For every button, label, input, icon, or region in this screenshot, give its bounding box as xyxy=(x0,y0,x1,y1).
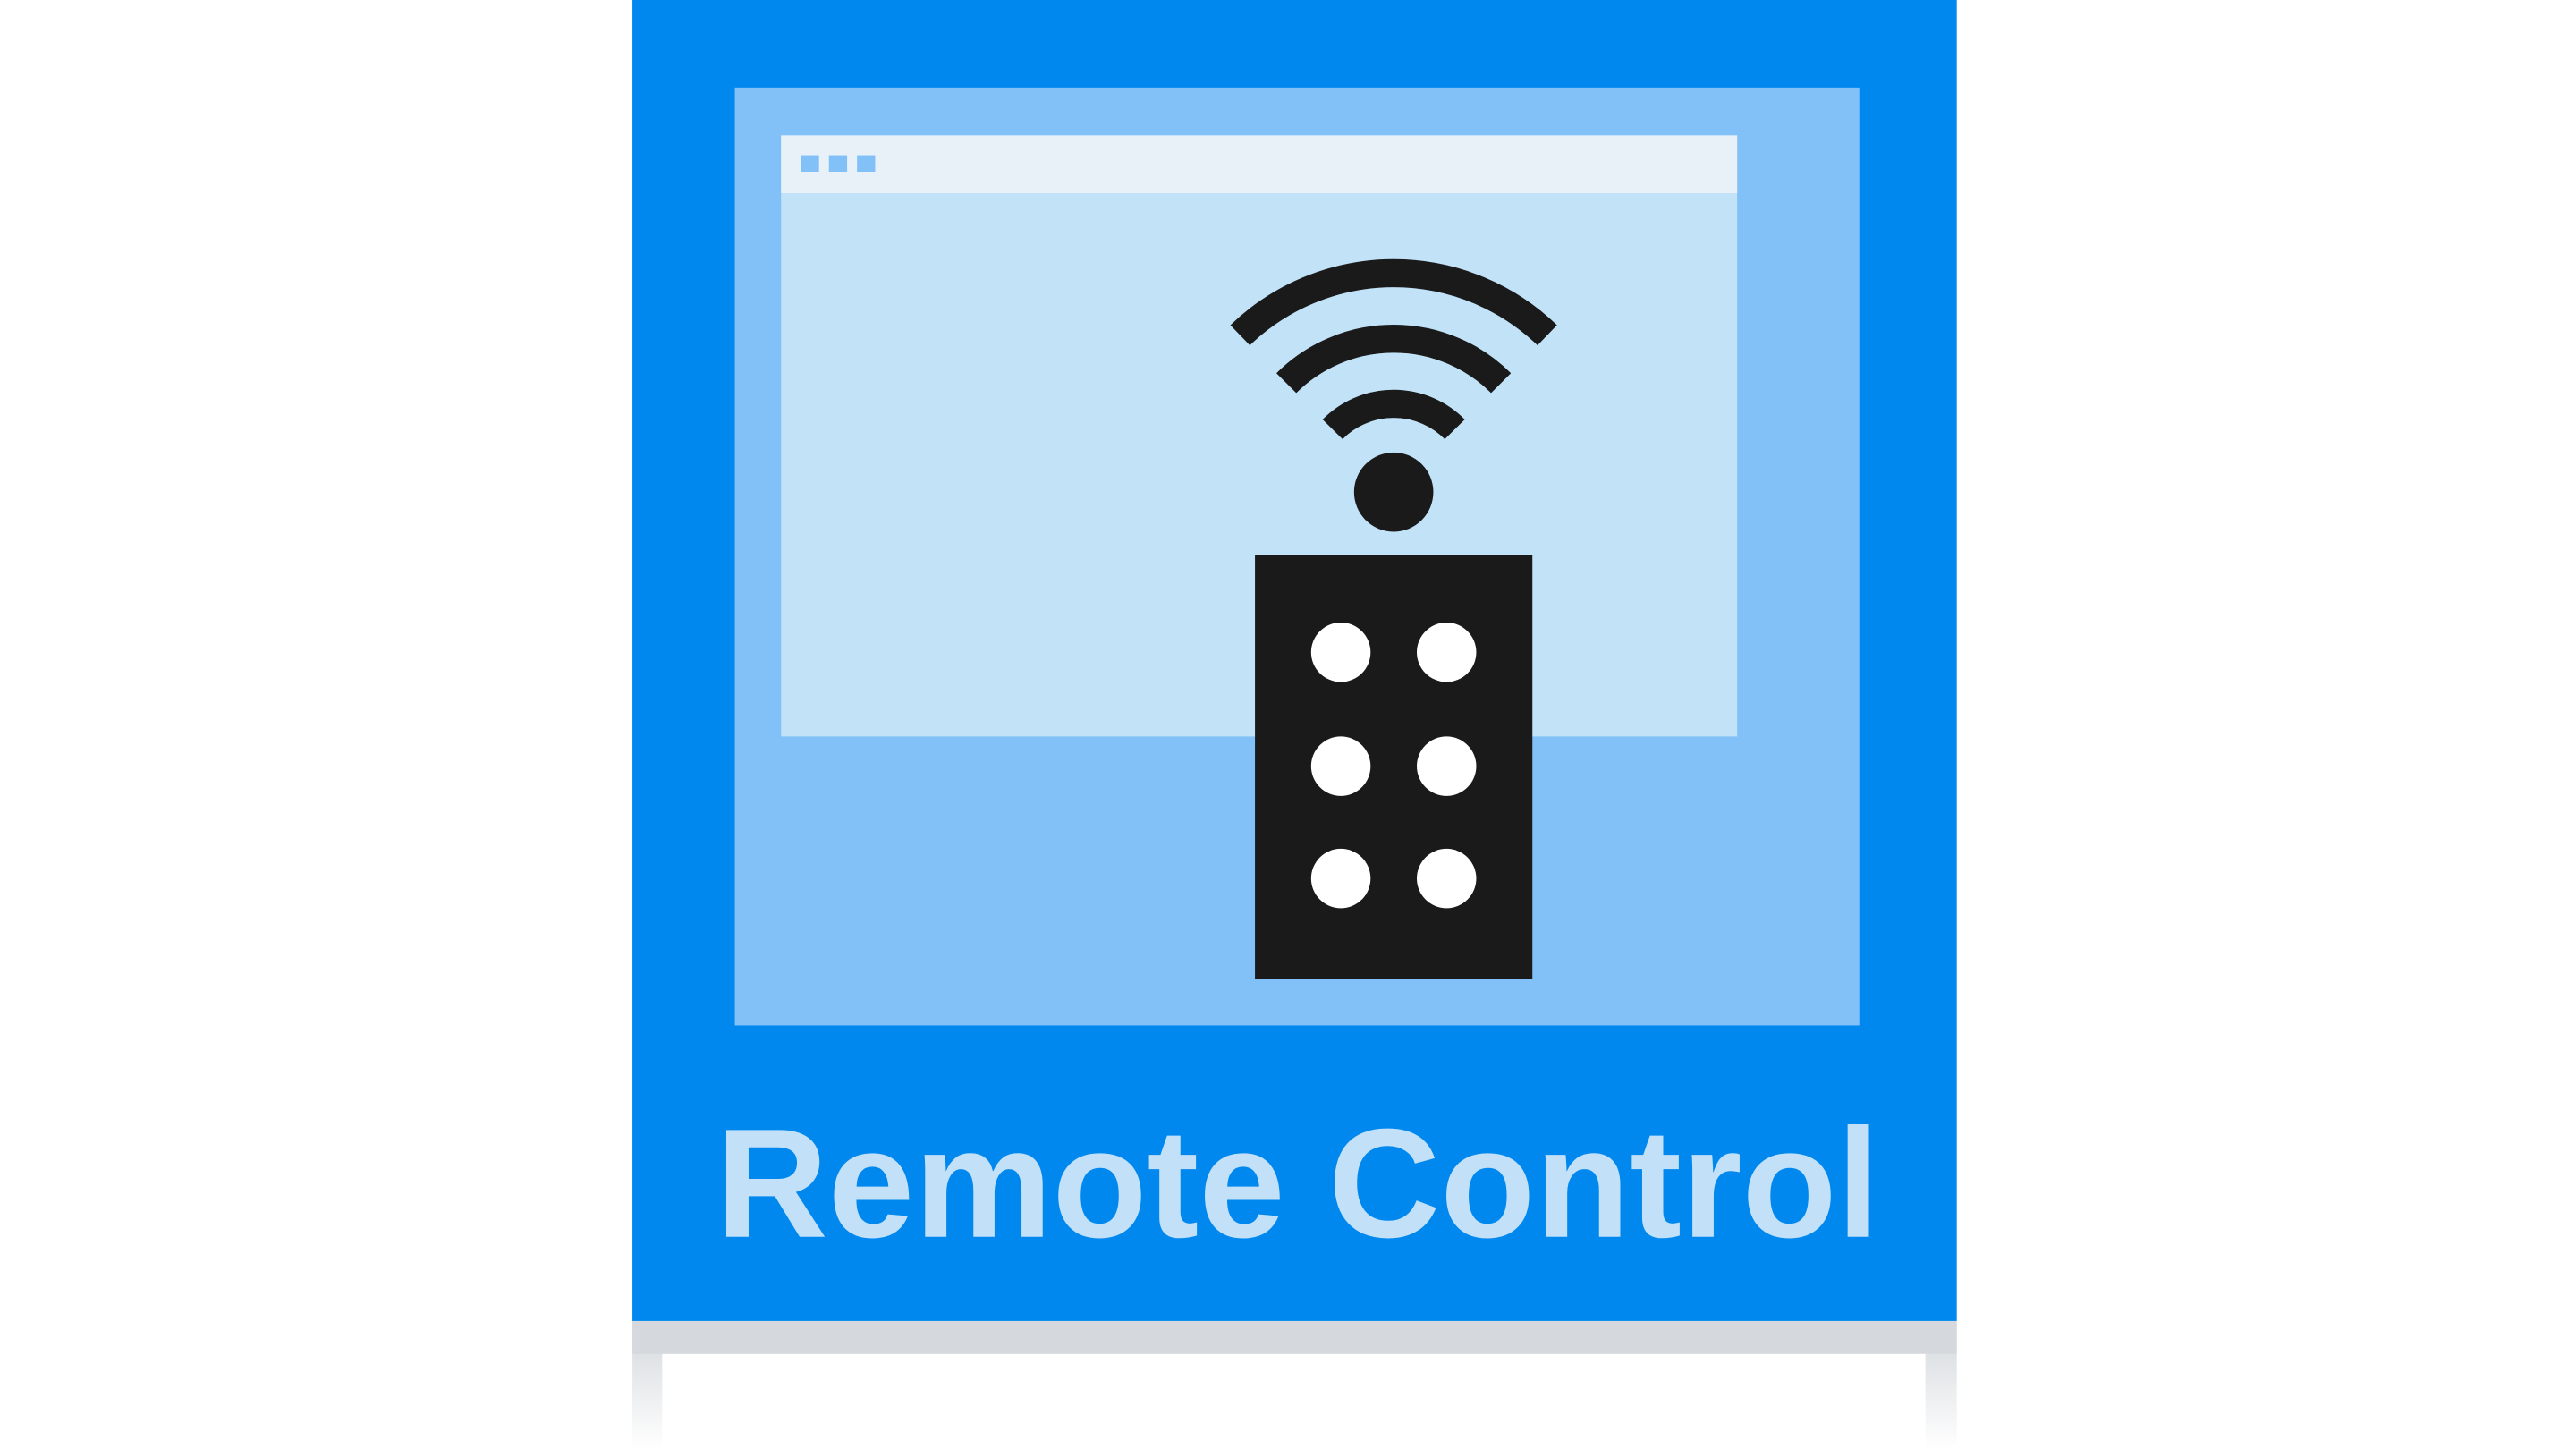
browser window xyxy=(781,135,1737,736)
shadow base under tile xyxy=(632,1321,1957,1449)
title: Remote Control xyxy=(716,1097,1880,1270)
panel: blue tile xyxy=(632,0,1957,1321)
window dots xyxy=(801,156,875,172)
icon: antenna dot xyxy=(1354,453,1433,531)
icon: wifi signal xyxy=(1240,273,1547,429)
inner light panel xyxy=(735,88,1860,1025)
icon: remote control xyxy=(1255,555,1532,979)
